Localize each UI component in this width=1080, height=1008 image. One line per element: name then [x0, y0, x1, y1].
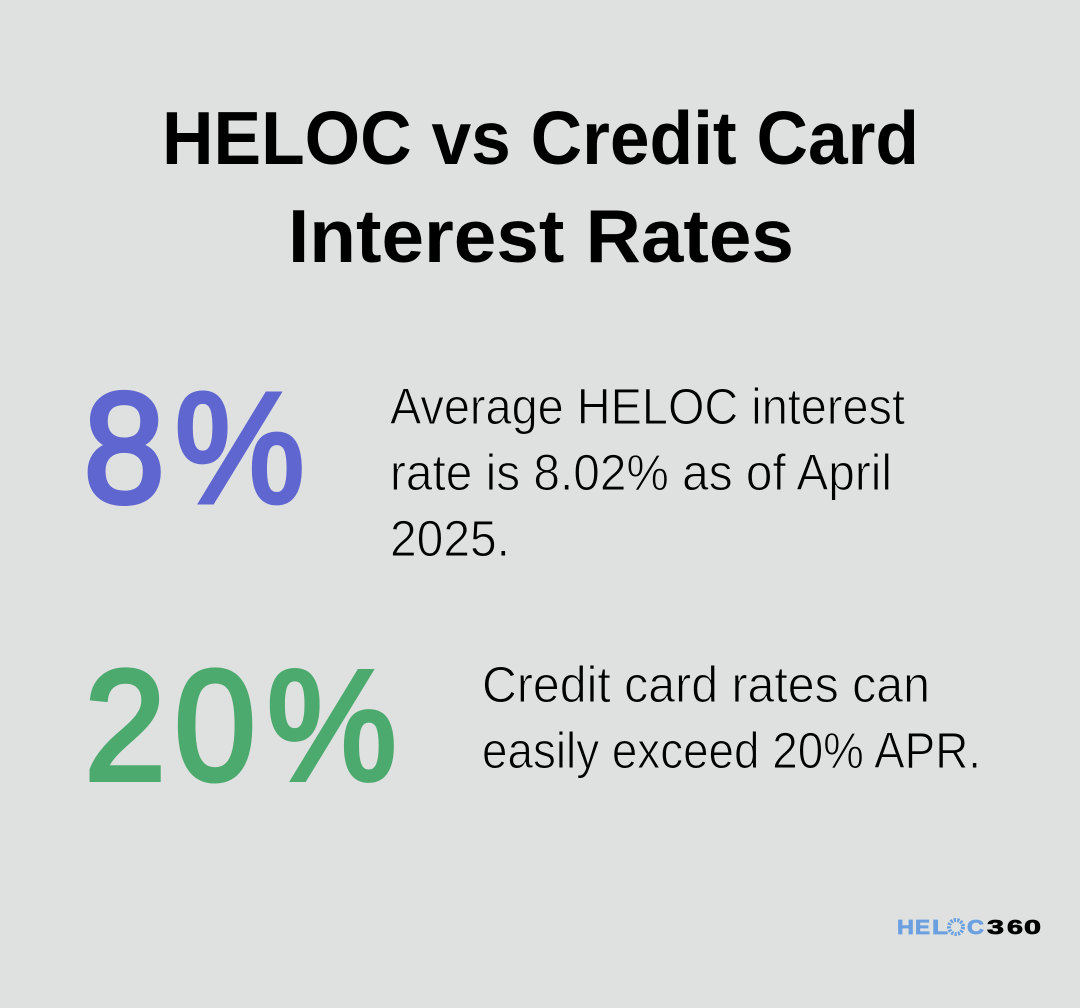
logo: HELOC360: 6	[1007, 917, 1023, 939]
title	[162, 96, 919, 278]
icon: swirl O	[949, 920, 963, 934]
logo: HELOC360: 0	[1024, 917, 1041, 939]
big number: 20%: 20%	[85, 639, 397, 814]
logo: HELOC360: H	[897, 917, 914, 939]
logo: HELOC360: 3	[987, 917, 1004, 939]
text block: HELOC rate description: rate is 8.02% as of April	[390, 444, 892, 501]
text block: credit card rate description: easily exceed 20% APR.	[482, 722, 981, 779]
text block: HELOC rate description	[390, 378, 905, 567]
logo: HELOC360: E	[915, 917, 930, 939]
logo: HELOC360: C	[967, 917, 984, 939]
stat: 8% HELOC rate	[84, 361, 905, 567]
title: HELOC vs Credit Card	[162, 96, 919, 180]
text block: HELOC rate description: 2025.	[390, 510, 510, 567]
text block: credit card rate description: Credit card rates can	[482, 656, 930, 713]
text block: credit card rate description	[482, 656, 981, 779]
text block: HELOC rate description: Average HELOC interest	[390, 378, 905, 435]
stat: 20% credit card rate	[85, 639, 981, 814]
title: Interest Rates	[288, 194, 794, 278]
logo: HELOC360: L	[932, 917, 948, 939]
big number: 8%: 8%	[84, 361, 305, 536]
logo: HELOC360	[897, 917, 1041, 939]
